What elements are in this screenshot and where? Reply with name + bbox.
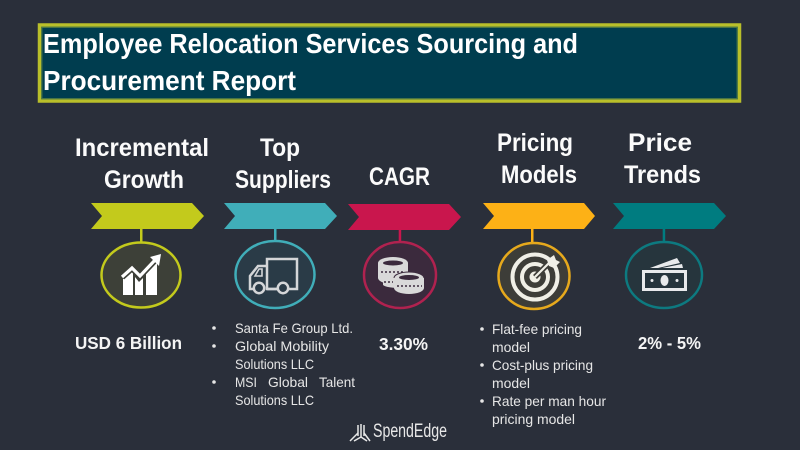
connector: dark teal xyxy=(663,229,665,242)
arrow: dark teal xyxy=(613,203,726,229)
list: pricing models: model xyxy=(492,339,530,355)
arrow: crimson xyxy=(348,204,461,230)
connector: lime xyxy=(140,229,142,243)
heading: price trends: Trends xyxy=(624,161,701,189)
value: 2% - 5%: 2% - 5% xyxy=(638,333,701,353)
connector: crimson xyxy=(399,230,401,243)
column: pricing models xyxy=(480,129,606,427)
heading: pricing models: Pricing xyxy=(497,129,573,157)
title banner: Employee Relocation Services Sourcing and xyxy=(43,28,578,59)
icon: truck xyxy=(236,241,314,308)
icon: growth chart xyxy=(102,242,180,308)
column: top suppliers xyxy=(212,134,355,408)
heading: price trends: Price xyxy=(628,129,692,157)
value: 3.30%: 3.30% xyxy=(379,334,428,354)
icon: coins xyxy=(364,242,436,308)
list: pricing models: Flat-fee pricing xyxy=(492,321,582,337)
list: suppliers: Global xyxy=(268,374,308,390)
heading: incremental growth: Incremental xyxy=(75,134,209,162)
arrow: amber xyxy=(483,203,595,229)
heading: pricing models: Models xyxy=(501,161,577,189)
list: pricing models: Rate per man hour xyxy=(492,393,606,409)
heading: CAGR: CAGR xyxy=(369,163,430,191)
list: suppliers: Global Mobility xyxy=(235,338,329,354)
list: suppliers: Santa Fe Group Ltd. xyxy=(235,320,353,336)
list: pricing models: model xyxy=(492,375,530,391)
logo: SpendEdge: SpendEdge xyxy=(373,421,447,442)
icon: target xyxy=(498,243,570,309)
arrow: teal xyxy=(224,203,337,229)
arrow: lime xyxy=(91,203,204,229)
column: price trends xyxy=(613,129,726,353)
value: USD 6 Billion: USD 6 Billion xyxy=(75,333,182,353)
list: suppliers xyxy=(212,320,355,408)
connector: teal xyxy=(274,229,276,241)
list: suppliers: Solutions LLC xyxy=(235,356,314,372)
heading: top suppliers: Suppliers xyxy=(235,166,331,194)
list: suppliers: Solutions LLC xyxy=(235,392,314,408)
list: suppliers: Talent xyxy=(319,374,355,390)
list: pricing models xyxy=(480,321,606,427)
column: CAGR xyxy=(348,163,461,354)
list: suppliers: MSI xyxy=(235,374,257,390)
heading: top suppliers: Top xyxy=(260,134,300,162)
column: incremental growth xyxy=(75,134,209,353)
connector: amber xyxy=(531,229,534,243)
list: pricing models: Cost-plus pricing xyxy=(492,357,593,373)
title banner: Procurement Report xyxy=(43,65,296,96)
list: pricing models: pricing model xyxy=(492,411,575,427)
title banner xyxy=(40,25,740,101)
heading: incremental growth: Growth xyxy=(104,166,184,194)
icon: banknotes xyxy=(626,242,702,308)
logo: SpendEdge xyxy=(350,421,447,442)
